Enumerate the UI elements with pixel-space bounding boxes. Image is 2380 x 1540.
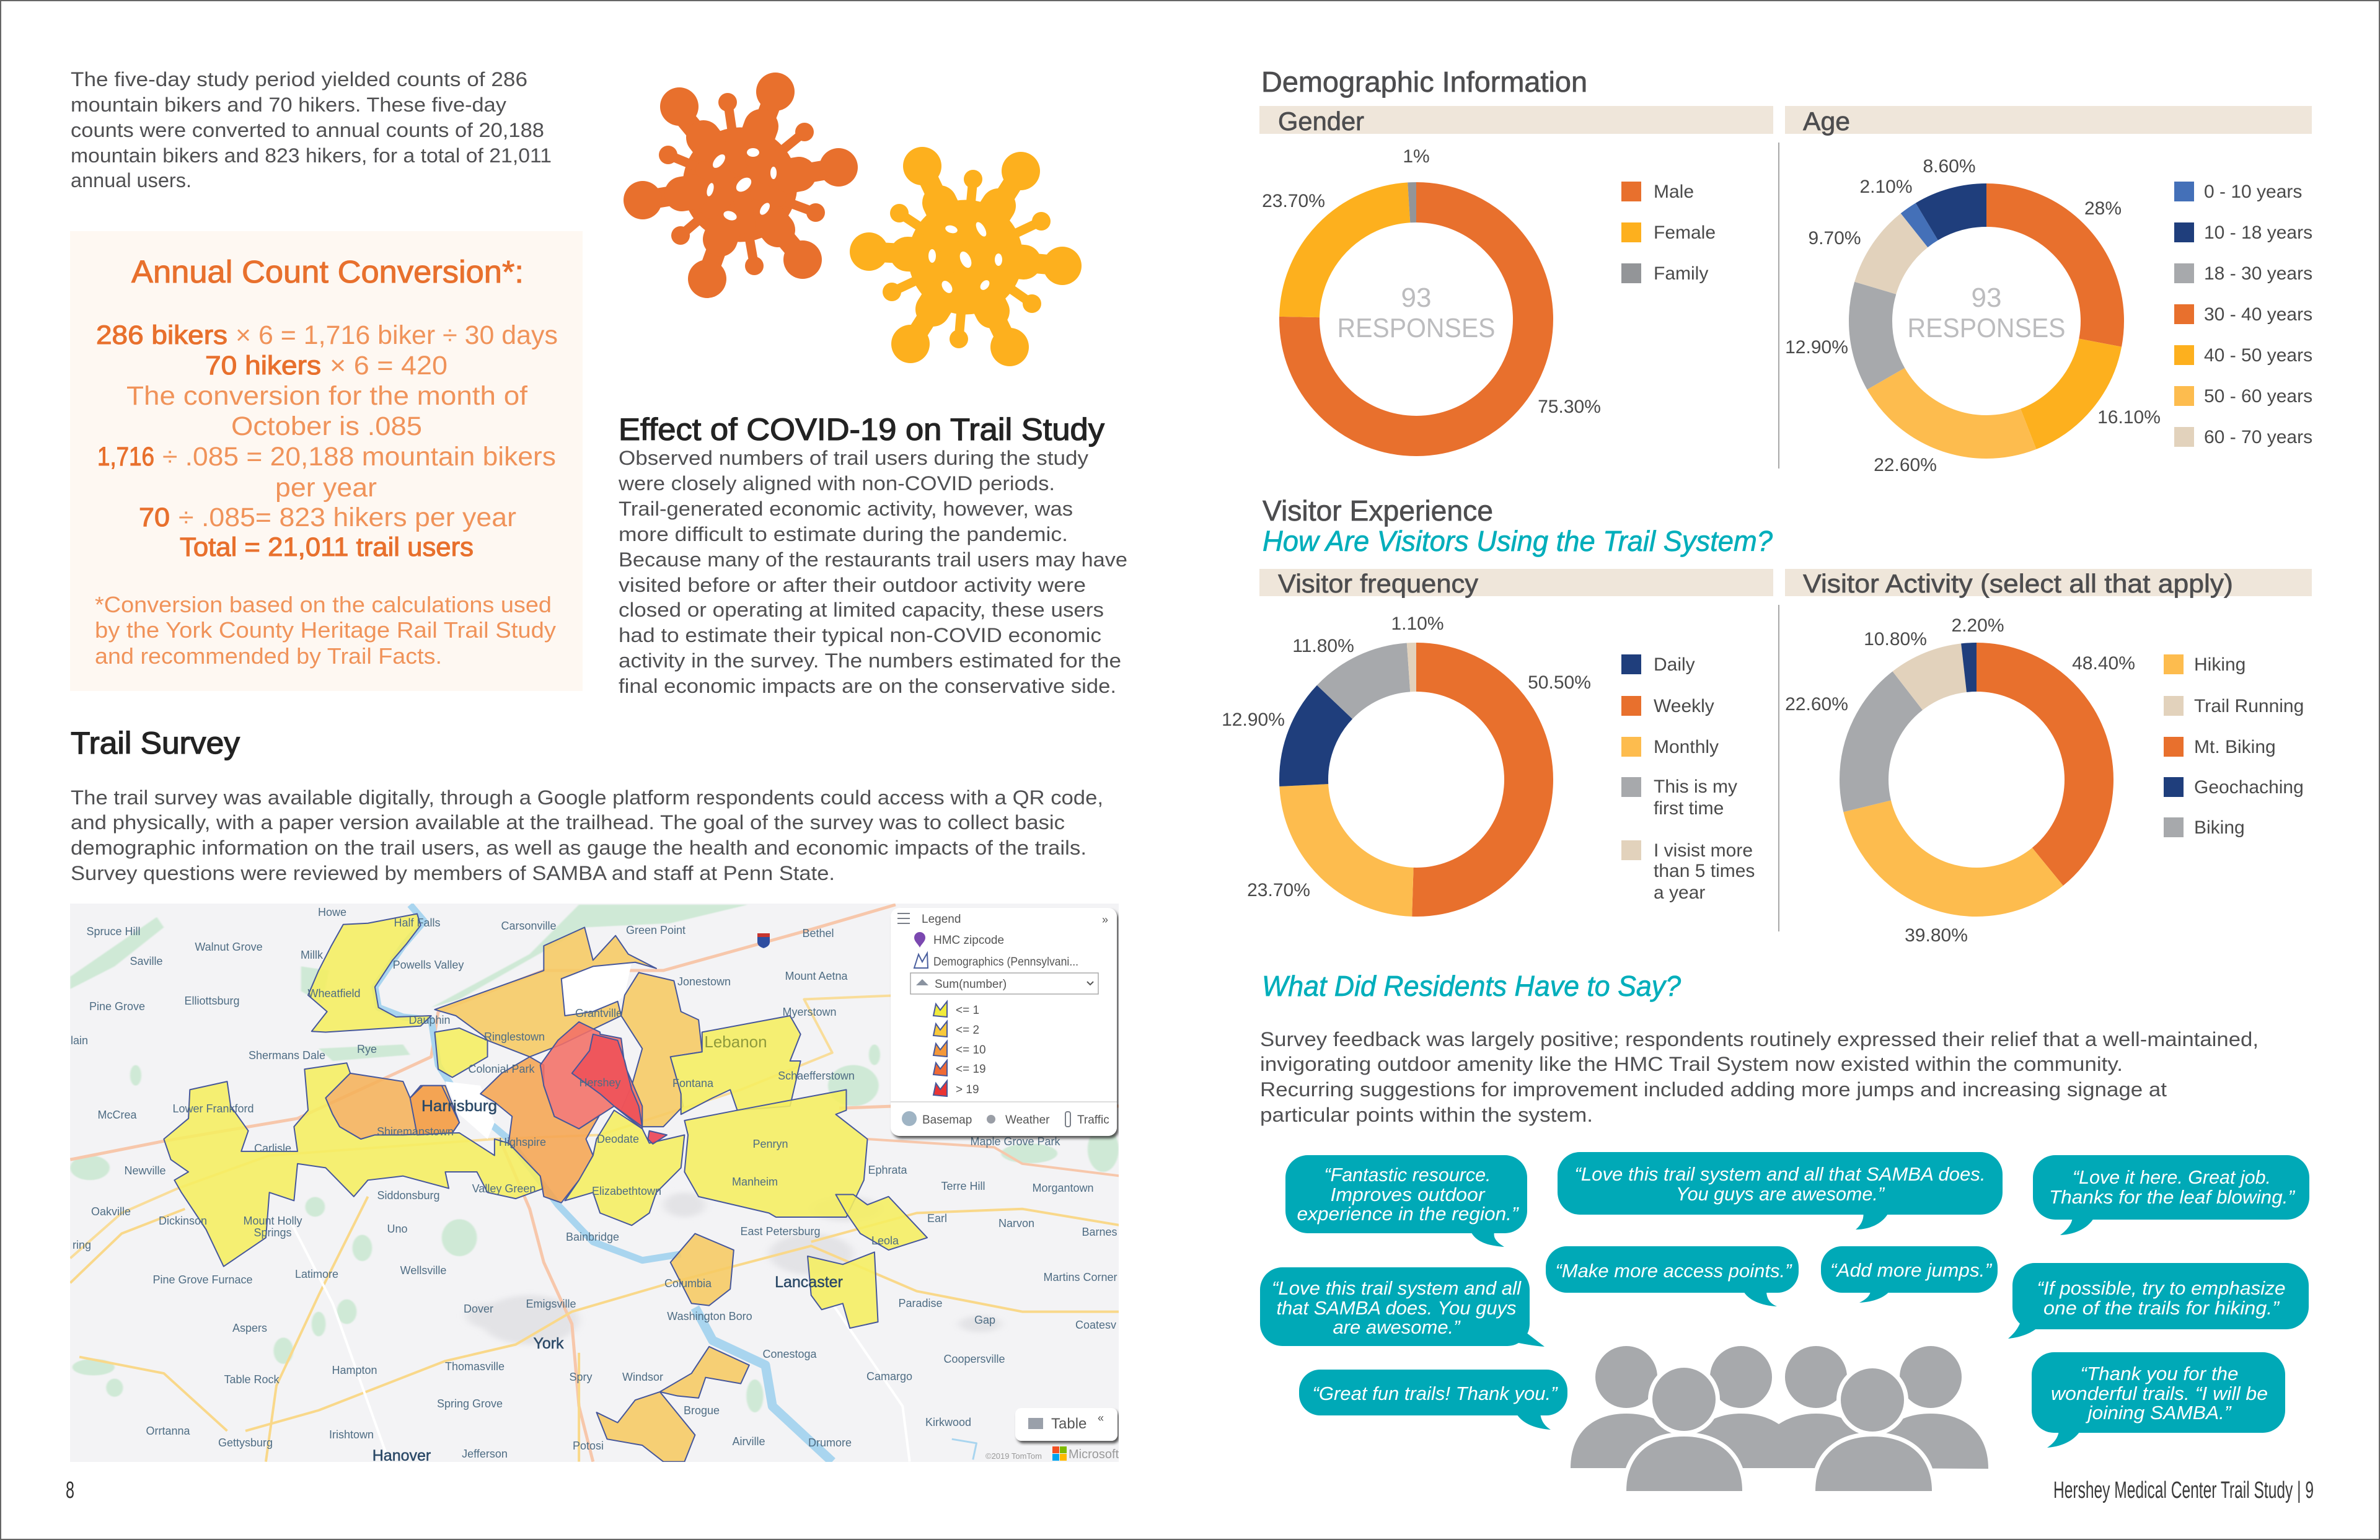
visitor frequency header bar: Visitor frequency [1278, 569, 1478, 598]
map place labels: Newville [124, 1164, 166, 1177]
map place labels: Potosi [573, 1440, 604, 1452]
map place labels: Colonial Park [468, 1063, 536, 1075]
legend demographics row: Demographics (Pennsylvani... [933, 956, 1078, 969]
map place labels: Mount Holly [243, 1215, 302, 1227]
speech bubble: thank you: “Thank you for the [2080, 1363, 2239, 1384]
layer icon [914, 953, 928, 968]
map place labels: Deodate [597, 1133, 639, 1145]
intro paragraph: counts were converted to annual counts of 20,188 [71, 119, 544, 141]
map place labels: Elliottsburg [184, 995, 240, 1007]
legend: age: 0 - 10 years [2204, 182, 2302, 202]
map: trail user zipcodes [70, 904, 1121, 1464]
footnote [95, 592, 556, 669]
legend: visitor frequency: This is my [1654, 777, 1737, 797]
gender center text: RESPONSES [1338, 313, 1495, 343]
map place labels: Pine Grove [89, 1000, 145, 1013]
map place labels: Fontana [672, 1077, 714, 1089]
page number 8: 8 [66, 1477, 74, 1503]
speech bubble: make more access points: “Make more access points.” [1556, 1260, 1792, 1282]
COVID body [618, 447, 1127, 697]
map place labels: Dover [464, 1303, 493, 1315]
legend header [897, 913, 1108, 926]
COVID body: Trail-generated economic activity, however, was [619, 498, 1073, 520]
map place labels: Millk [301, 949, 324, 961]
speech bubble: fantastic resource [1285, 1155, 1527, 1247]
intro paragraph: mountain bikers and 823 hikers, for a total of 21,011 [71, 144, 552, 167]
text block: survey feedback: particular points within the system. [1260, 1104, 1593, 1126]
legend: visitor frequency: Monthly [1654, 737, 1719, 757]
conversion line 2 [205, 351, 447, 381]
map place labels: Siddonsburg [377, 1189, 440, 1202]
panel heading: Annual Count Conversion*: [131, 254, 524, 289]
legend class labels: <= 19 [956, 1063, 986, 1076]
legend: gender: Family [1654, 263, 1708, 284]
activity value labels: 2.20% [1951, 615, 2004, 636]
map place labels: Mount Aetna [785, 970, 848, 982]
map place labels: Spruce Hill [86, 925, 141, 938]
map legend panel [891, 908, 1117, 1136]
chart: visitor activity donut [1785, 615, 2135, 946]
table button: « [1098, 1412, 1104, 1424]
map place labels: Earl [927, 1212, 947, 1225]
map city labels: York [533, 1335, 564, 1352]
text block: trail survey: Survey questions were reviewed by members of SAMBA and staff at Penn State. [71, 862, 835, 884]
activity value labels [1785, 615, 2135, 946]
map city labels: Lebanon [704, 1032, 767, 1051]
map place labels: Brogue [684, 1404, 720, 1417]
text block: survey feedback: Recurring suggestions for improvement included adding more jumps and increasing signage at [1260, 1078, 2167, 1101]
map place labels: Pine Grove Furnace [152, 1274, 253, 1286]
frequency value labels: 12.90% [1222, 710, 1285, 730]
legend footer tools [902, 1111, 1109, 1127]
activity value labels: 39.80% [1905, 925, 1968, 946]
map place labels: Half Falls [394, 917, 441, 929]
text block: survey feedback: invigorating outdoor amenity like the HMC Trail System now existed within the community. [1260, 1053, 2123, 1075]
table button [1015, 1408, 1117, 1441]
chart: gender donut [1262, 146, 1601, 436]
map place labels: Emigsville [526, 1298, 576, 1310]
COVID body: closed or operating at limited capacity, these users [619, 599, 1104, 621]
speech bubble: fantastic resource: “Fantastic resource. [1324, 1164, 1491, 1186]
COVID body: activity in the survey. The numbers estimated for the [619, 649, 1121, 672]
legend class labels: <= 1 [956, 1004, 979, 1017]
map place labels: Kirkwood [925, 1416, 971, 1428]
legend: visitor activity: Geochaching [2194, 777, 2304, 798]
age header bar: Age [1803, 107, 1850, 136]
activity value labels: 48.40% [2072, 653, 2135, 674]
conversion line 7: ÷ .085= 823 hikers per year [178, 503, 516, 532]
map place labels: Manheim [732, 1176, 778, 1188]
age value labels: 8.60% [1923, 156, 1976, 177]
map place labels: Highspire [499, 1136, 546, 1148]
age center text [1908, 283, 2065, 343]
map place labels: Uno [387, 1223, 408, 1235]
legend footer tools: Basemap [922, 1114, 972, 1127]
age value labels: 16.10% [2097, 407, 2161, 428]
map place labels: Drumore [808, 1437, 852, 1449]
map place labels: Bainbridge [566, 1231, 619, 1243]
icon: purple pin [914, 932, 925, 948]
map place labels: Schaefferstown [778, 1070, 855, 1082]
gender center text [1338, 283, 1495, 343]
COVID body: had to estimate their typical non-COVID economic [619, 624, 1101, 646]
conversion line 5: 1,716 [97, 442, 154, 472]
speech bubble: if possible: “If possible, try to emphasize [2037, 1277, 2286, 1299]
legend: visitor frequency: first time [1654, 798, 1724, 819]
activity value labels: 10.80% [1864, 629, 1927, 649]
map place labels: Airville [732, 1435, 765, 1448]
map place labels: Narvon [998, 1217, 1034, 1230]
frequency value labels [1222, 614, 1591, 900]
speech bubble: love this trail system left: “Love this trail system and all [1272, 1277, 1522, 1299]
text block: trail survey: demographic information on the trail users, as well as gauge the health and economic impacts of the trails. [71, 837, 1086, 859]
COVID body: final economic impacts are on the conservative side. [619, 675, 1116, 697]
conversion line 1 [96, 320, 558, 350]
frequency value labels: 23.70% [1247, 880, 1310, 900]
visitor frequency header bar [1259, 569, 1773, 598]
speech bubble: add more jumps [1821, 1246, 1998, 1303]
map place labels: Powells Valley [393, 959, 464, 971]
icon: yellow virus [850, 147, 1082, 366]
map place labels: Valley Green [472, 1182, 536, 1195]
map place labels: Maple Grove Park [970, 1135, 1061, 1148]
map place labels: Elizabethtown [592, 1185, 661, 1197]
legend class swatches [933, 1001, 947, 1096]
map place labels: Wellsville [400, 1264, 446, 1277]
map place labels: Coopersville [943, 1353, 1005, 1365]
legend: visitor activity: Trail Running [2194, 696, 2304, 716]
speech bubble: add more jumps: “Add more jumps.” [1830, 1259, 1993, 1281]
map place labels: Columbia [664, 1277, 712, 1290]
speech bubble: love this trail system left: that SAMBA does. You guys [1277, 1297, 1516, 1319]
conversion line 3: The conversion for the month of [126, 381, 528, 411]
map place labels: Table Rock [224, 1373, 280, 1386]
speech bubble: fantastic resource: experience in the region.” [1297, 1203, 1519, 1225]
age value labels: 9.70% [1808, 228, 1861, 249]
legend layer name: HMC zipcode [933, 934, 1004, 947]
map place labels: Jonestown [677, 975, 731, 988]
speech bubble: love this trail system left: are awesome.” [1333, 1316, 1461, 1338]
speech bubble: love it here [2033, 1155, 2309, 1235]
legend class labels: > 19 [956, 1083, 979, 1096]
speech bubble: if possible: one of the trails for hiking.” [2043, 1297, 2280, 1319]
legend: gender: Female [1654, 222, 1716, 243]
legend: age: 40 - 50 years [2204, 345, 2312, 366]
age value labels: 2.10% [1859, 177, 1913, 197]
age header bar [1785, 106, 2312, 136]
age value labels: 28% [2084, 198, 2122, 219]
legend: visitor frequency: than 5 times [1654, 861, 1755, 881]
map place labels: Barnes [1082, 1226, 1117, 1238]
footnote: *Conversion based on the calculations used [95, 592, 552, 617]
map place labels: McCrea [97, 1109, 137, 1121]
gender center text: 93 [1401, 283, 1431, 313]
map place labels: Windsor [622, 1371, 663, 1383]
map place labels: Hampton [332, 1364, 377, 1376]
map place labels: Ringlestown [484, 1031, 545, 1043]
legend: visitor frequency [1621, 654, 1755, 903]
heading: demographic information: Demographic Information [1261, 66, 1587, 98]
map attribution: ©2019 TomTom [985, 1451, 1042, 1461]
conversion line 5: ÷ .085 = 20,188 mountain bikers [162, 442, 556, 472]
footnote: by the York County Heritage Rail Trail Study [95, 617, 556, 643]
legend: age: 30 - 40 years [2204, 304, 2312, 325]
map place labels: Bethel [802, 927, 834, 939]
icon: orange virus [624, 73, 858, 298]
map place labels: Green Point [626, 924, 685, 936]
conversion line 1: × 6 = 1,716 biker ÷ 30 days [236, 320, 558, 350]
gender value labels [1262, 146, 1601, 417]
legend: visitor activity [2164, 654, 2304, 838]
COVID body: were closely aligned with non-COVID periods. [618, 472, 1055, 495]
speech bubble: love this trail system left [1260, 1267, 1545, 1347]
legend header: » [1102, 913, 1108, 926]
gender header bar: Gender [1278, 107, 1364, 136]
map place labels: Springs [253, 1226, 292, 1239]
map place labels: Rye [357, 1043, 377, 1055]
map place labels: Spry [569, 1371, 593, 1383]
legend footer tools: Weather [1005, 1114, 1050, 1127]
legend: visitor frequency: a year [1654, 882, 1705, 903]
legend class labels [956, 1004, 986, 1096]
legend header: Legend [922, 913, 961, 926]
speech bubble: love it here: Thanks for the leaf blowing.” [2049, 1186, 2296, 1208]
map place labels: Gettysburg [218, 1437, 273, 1449]
map place labels: Hershey [579, 1076, 621, 1089]
map place labels: ring [73, 1239, 91, 1251]
map place labels: Terre Hill [941, 1180, 985, 1192]
legend footer tools: Traffic [1077, 1114, 1109, 1127]
map place labels: Saville [130, 955, 163, 967]
chart: visitor frequency donut [1222, 614, 1591, 900]
intro paragraph: mountain bikers and 70 hikers. These five-day [71, 94, 506, 116]
dropdown: Sum(number) [935, 978, 1007, 991]
map place labels: Dauphin [408, 1014, 451, 1026]
COVID body: Observed numbers of trail users during the study [619, 447, 1088, 469]
map place labels: Walnut Grove [195, 941, 263, 953]
map place labels: Penryn [752, 1138, 788, 1150]
COVID heading: Effect of COVID-19 on Trail Study [619, 412, 1104, 447]
legend: gender [1621, 182, 1716, 284]
speech bubble: love it here: “Love it here. Great job. [2073, 1166, 2271, 1188]
subheading: what did residents have to say: What Did Residents Have to Say? [1262, 970, 1681, 1002]
legend: age: 18 - 30 years [2204, 263, 2312, 284]
speech bubble: love this trail system top [1558, 1152, 2003, 1230]
map place labels: Shiremanstown [377, 1125, 454, 1138]
map place labels: Myerstown [782, 1006, 837, 1018]
gender value labels: 23.70% [1262, 191, 1325, 211]
legend: visitor activity: Biking [2194, 817, 2245, 838]
age value labels [1785, 156, 2161, 475]
map place labels: Martins Corner [1043, 1271, 1117, 1283]
map place labels: Spring Grove [437, 1397, 503, 1410]
map city labels: Harrisburg [421, 1098, 497, 1115]
legend: age: 60 - 70 years [2204, 427, 2312, 447]
icon: interstate shield [757, 933, 770, 948]
legend: visitor frequency: I visist more [1654, 840, 1753, 861]
intro paragraph: annual users. [71, 169, 192, 191]
conversion total: Total = 21,011 trail users [180, 532, 474, 562]
legend: visitor frequency: Weekly [1654, 696, 1714, 716]
legend: age [2174, 182, 2312, 447]
map place labels: Grantville [575, 1007, 622, 1019]
legend: visitor activity: Hiking [2194, 654, 2246, 675]
conversion line 1: 286 bikers [96, 320, 227, 350]
map place labels: Irishtown [329, 1428, 374, 1441]
map place labels: Camargo [866, 1370, 912, 1383]
gender header bar [1259, 106, 1773, 136]
activity value labels: 22.60% [1785, 694, 1848, 715]
map city labels: Lancaster [775, 1274, 843, 1291]
map place labels: Coatesv [1075, 1319, 1116, 1331]
gender value labels: 1% [1403, 146, 1430, 167]
speech bubble: if possible [2008, 1263, 2309, 1339]
speech bubble: great fun trails: “Great fun trails! Thank you.” [1313, 1383, 1558, 1404]
conversion line 2: × 6 = 420 [330, 351, 447, 381]
speech bubble: thank you: joining SAMBA.” [2085, 1402, 2232, 1423]
speech bubble: great fun trails [1299, 1370, 1567, 1430]
speech bubble: love this trail system top: “Love this trail system and all that SAMBA does. [1574, 1163, 1986, 1185]
map place labels: Conestoga [762, 1348, 818, 1360]
footnote: and recommended by Trail Facts. [95, 643, 442, 669]
frequency value labels: 11.80% [1292, 636, 1354, 656]
speech bubble: fantastic resource: Improves outdoor [1330, 1184, 1486, 1205]
map place labels: Orrtanna [146, 1425, 190, 1437]
speech bubble: thank you: wonderful trails. “I will be [2051, 1383, 2268, 1404]
text block: trail survey: The trail survey was available digitally, through a Google platform respondents could access with a QR code, [71, 786, 1103, 809]
map place labels: Carsonville [501, 920, 557, 932]
map place labels: Shermans Dale [249, 1049, 325, 1062]
map place labels: Jefferson [462, 1448, 508, 1460]
heading: visitor experience: Visitor Experience [1263, 495, 1493, 527]
table button: Table [1051, 1415, 1086, 1432]
intro paragraph [71, 68, 552, 191]
legend: gender: Male [1654, 182, 1694, 202]
text block: survey feedback: Survey feedback was largely positive; respondents routinely expressed their relief that a well-maintained, [1260, 1028, 2259, 1050]
map place labels: Leola [871, 1234, 899, 1247]
subheading: how are visitors using the trail system: How Are Visitors Using the Trail System? [1263, 525, 1773, 557]
frequency value labels: 1.10% [1391, 614, 1444, 634]
gender value labels: 75.30% [1538, 397, 1601, 417]
panel: annual count conversion [70, 231, 583, 691]
legend class labels: <= 10 [956, 1044, 986, 1057]
map place labels: East Petersburg [740, 1225, 821, 1238]
legend: age: 50 - 60 years [2204, 386, 2312, 407]
map place labels: Paradise [898, 1297, 943, 1309]
age center text: 93 [1972, 283, 2001, 313]
intro paragraph: The five-day study period yielded counts of 286 [71, 68, 527, 90]
map place labels: Thomasville [445, 1360, 505, 1373]
map place labels: Latimore [295, 1268, 338, 1280]
legend class labels: <= 2 [956, 1024, 979, 1037]
speech bubble: love this trail system top: You guys are awesome.” [1676, 1183, 1885, 1205]
speech bubble: make more access points [1546, 1246, 1799, 1306]
conversion line 4: October is .085 [231, 411, 422, 441]
text block: trail survey [71, 786, 1103, 884]
COVID body: more difficult to estimate during the pandemic. [619, 523, 1068, 545]
dropdown [910, 973, 1098, 994]
legend: visitor frequency: Daily [1654, 654, 1695, 675]
age value labels: 12.90% [1785, 337, 1848, 358]
map place labels: Oakville [91, 1205, 131, 1218]
map place labels: Ephrata [868, 1164, 908, 1176]
conversion line 7: 70 [139, 503, 170, 532]
map place labels: Dickinson [159, 1215, 207, 1227]
map place labels: Gap [974, 1314, 995, 1326]
conversion line 6: per year [275, 473, 377, 503]
conversion line 2: 70 hikers [205, 351, 321, 381]
age center text: RESPONSES [1908, 313, 2065, 343]
speech bubble: thank you [2032, 1352, 2285, 1448]
text block: trail survey: and physically, with a paper version available at the trailhead. The goal of the survey was to collect basic [71, 811, 1065, 834]
map attribution: Microsoft [1069, 1448, 1119, 1461]
map place labels: Carlisle [254, 1142, 291, 1155]
heading: trail survey: Trail Survey [71, 726, 240, 760]
map place labels: Wheatfield [307, 987, 361, 1000]
legend: visitor activity: Mt. Biking [2194, 737, 2276, 757]
map place labels: Aspers [232, 1322, 267, 1334]
map place labels: Lower Frankford [172, 1102, 254, 1115]
map place labels: Howe [318, 906, 346, 918]
chart: age donut [1785, 156, 2161, 475]
visitor activity header bar: Visitor Activity (select all that apply) [1803, 569, 2233, 598]
age value labels: 22.60% [1874, 455, 1937, 475]
map place labels: lain [71, 1034, 88, 1047]
map place labels [71, 906, 1117, 1460]
map attribution [985, 1446, 1119, 1461]
legend: age: 10 - 18 years [2204, 222, 2312, 243]
map place labels: Morgantown [1032, 1182, 1094, 1194]
map place labels: Washington Boro [667, 1310, 752, 1322]
icon: group of people [1571, 1346, 1988, 1491]
text block: survey feedback [1260, 1028, 2259, 1126]
COVID body: Because many of the restaurants trail users may have [619, 548, 1127, 571]
map city labels [372, 1032, 843, 1464]
frequency value labels: 50.50% [1528, 672, 1591, 693]
COVID body: visited before or after their outdoor activity were [619, 574, 1086, 596]
map city labels: Hanover [372, 1447, 431, 1464]
text block: effect of COVID-19 [618, 412, 1127, 697]
